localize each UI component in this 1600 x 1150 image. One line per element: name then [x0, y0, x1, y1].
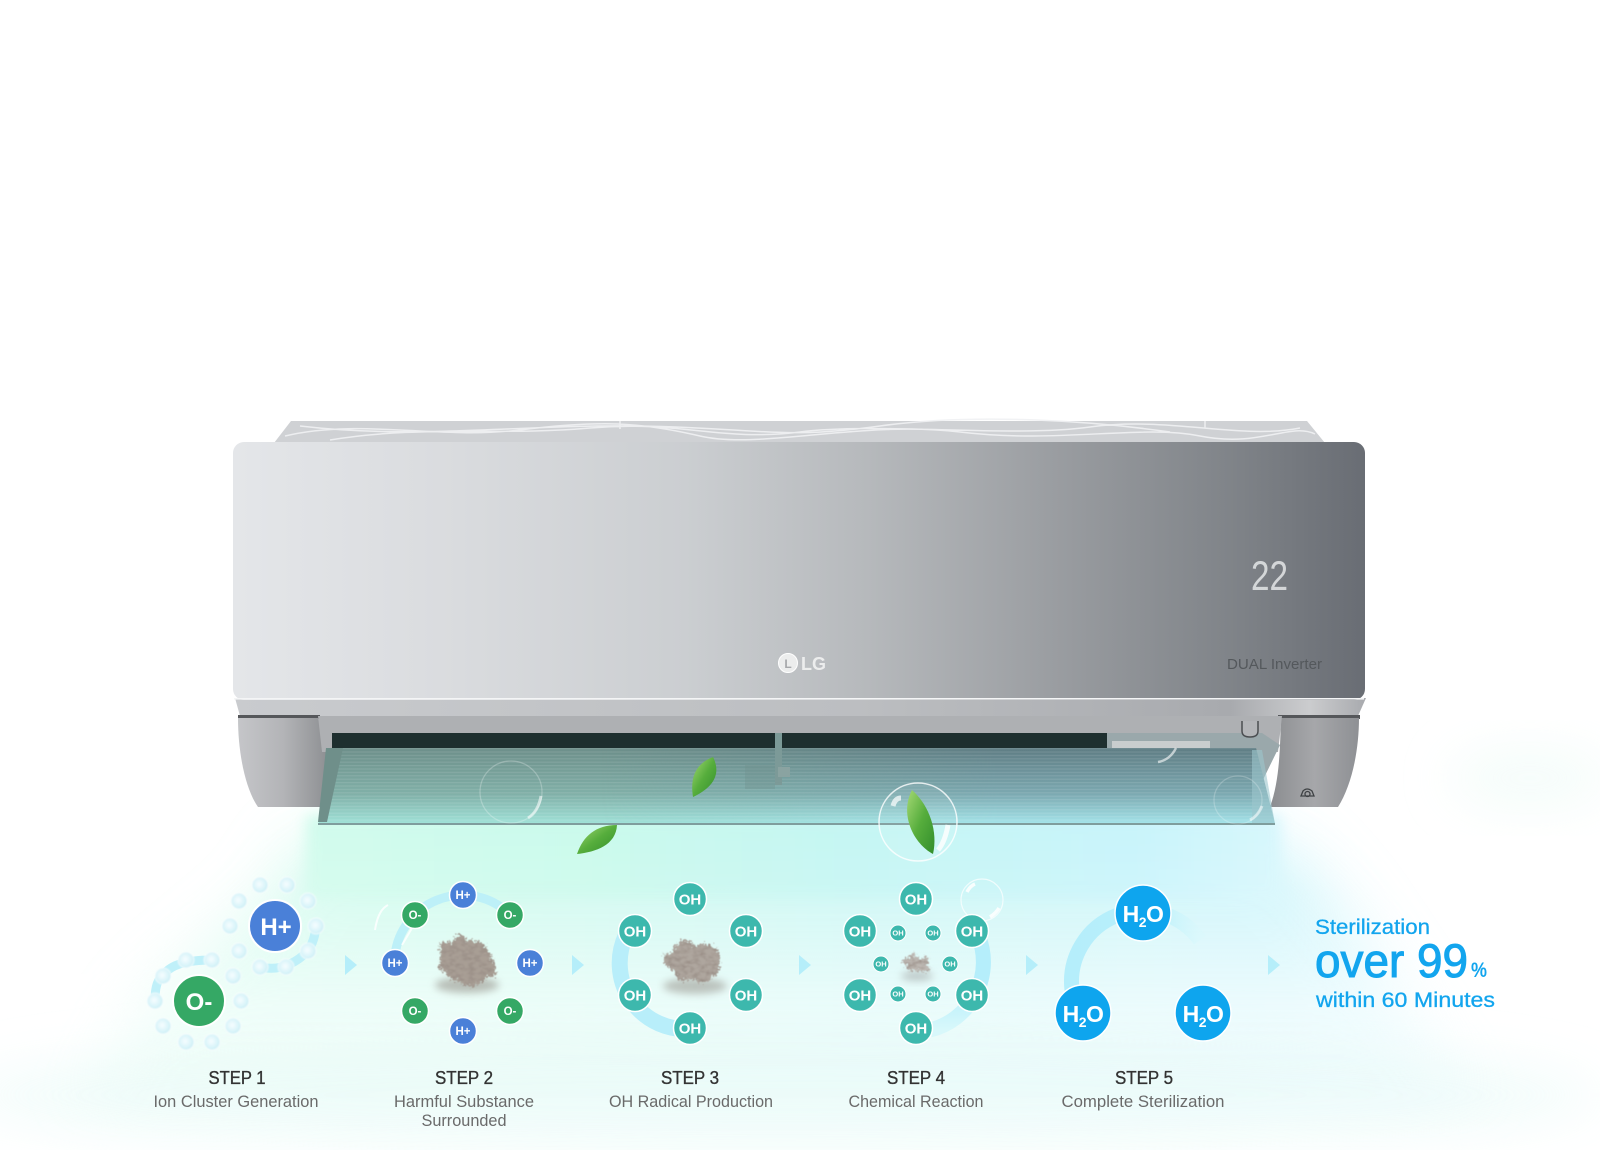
bubble: louver right: [1214, 776, 1262, 824]
ion labels: [387, 890, 538, 1038]
step 2 label: STEP 2: [435, 1068, 493, 1088]
ring arc: [395, 895, 505, 955]
step 2 description: Surrounded: [422, 1112, 506, 1130]
ion labels: H+: [522, 958, 538, 970]
arrow 5: [1268, 955, 1280, 975]
small OH ions: [873, 925, 958, 1002]
small OH labels: OH: [892, 929, 904, 938]
OH ions: [618, 882, 762, 1044]
arrow 4: [1026, 955, 1038, 975]
LG logo: LG: [801, 654, 826, 674]
over 99 percent: %: [1471, 959, 1487, 982]
leaf in bubble: [907, 790, 934, 854]
dust: [438, 940, 496, 984]
step 4: [844, 879, 1003, 1111]
louver: [318, 748, 1275, 825]
within 60 minutes line: within 60 Minutes: [1315, 989, 1495, 1012]
vent clip: [1112, 741, 1210, 749]
step 1 label: STEP 1: [208, 1068, 266, 1088]
H2O molecule right: [1175, 985, 1231, 1041]
H2O molecule right: H: [1183, 1001, 1199, 1027]
vent housing: [318, 716, 1282, 752]
large OH labels: OH: [849, 988, 871, 1004]
right end cap: [1270, 718, 1359, 807]
background mist: [0, 752, 1600, 1150]
result callout: [1315, 916, 1495, 1012]
leaf: lower: [577, 825, 617, 854]
large OH labels: OH: [905, 892, 927, 908]
H2O molecule left: 2: [1079, 1014, 1087, 1030]
small OH labels: OH: [927, 929, 939, 938]
H2O molecule left: [1055, 985, 1111, 1041]
small OH labels: [875, 929, 956, 999]
ion cluster arcs: [155, 926, 316, 1001]
step 5: [1055, 885, 1231, 1111]
H2O molecule top: [1115, 885, 1171, 941]
lower band: [235, 698, 1366, 716]
step 2: [375, 882, 544, 1130]
vent slot: [332, 733, 1108, 748]
bubble: [375, 905, 412, 945]
H2O molecule right: O: [1206, 1001, 1223, 1027]
LG logo: [778, 654, 826, 674]
ion labels: H+: [455, 1026, 471, 1038]
large OH labels: OH: [905, 1020, 927, 1038]
air conditioner unit: [233, 419, 1366, 825]
step 2 description: Harmful Substance: [394, 1093, 534, 1111]
step 3 label: STEP 3: [661, 1068, 719, 1088]
OH labels: OH: [735, 924, 757, 940]
H2O molecule left: O: [1086, 1001, 1103, 1027]
bubble: [961, 879, 1003, 921]
DUAL Inverter label: DUAL Inverter: [1227, 657, 1322, 673]
panel highlight: [234, 698, 1364, 700]
OH labels: OH: [679, 1020, 701, 1038]
dust shadow: [901, 971, 933, 981]
sterilization line: Sterilization: [1315, 916, 1430, 939]
water dots: [147, 877, 324, 1050]
ion labels: O-: [409, 910, 422, 922]
H2O molecule top: O: [1146, 901, 1163, 927]
OH labels: OH: [679, 892, 701, 908]
O- ion: O-: [186, 989, 212, 1016]
OH labels: OH: [624, 924, 646, 940]
right latch: [1242, 721, 1258, 737]
step 1: [147, 877, 324, 1111]
ring arc: [620, 935, 690, 1029]
bubble: louver left: [480, 761, 542, 823]
dust shadow: [435, 977, 499, 993]
leaf: upper: [692, 757, 716, 797]
ion labels: H+: [387, 958, 403, 970]
OH labels: OH: [624, 988, 646, 1004]
ion labels: O-: [504, 910, 517, 922]
O- ion: [173, 975, 225, 1027]
ring arc: [1072, 911, 1200, 990]
small OH labels: OH: [892, 990, 904, 999]
ring arc: [930, 935, 983, 1030]
ion labels: O-: [504, 1006, 517, 1018]
H+ ion: [249, 900, 301, 952]
step 3 description: OH Radical Production: [609, 1093, 773, 1111]
top shell: [274, 419, 1325, 443]
arrow 3: [799, 955, 811, 975]
H2O molecule left: H: [1063, 1001, 1079, 1027]
small OH labels: OH: [875, 960, 887, 969]
step 4 label: STEP 4: [887, 1068, 945, 1088]
ion labels: H+: [455, 890, 471, 902]
step 4 description: Chemical Reaction: [848, 1093, 984, 1111]
H2O molecule right: 2: [1199, 1014, 1207, 1030]
step 1 description: Ion Cluster Generation: [154, 1093, 318, 1111]
OH labels: OH: [735, 988, 757, 1004]
large OH ions: [844, 882, 988, 1044]
dust: [904, 952, 930, 974]
H2O molecule top: H: [1123, 901, 1139, 927]
LG logo: L: [784, 657, 792, 671]
small OH labels: OH: [944, 960, 956, 969]
large OH labels: [849, 892, 983, 1038]
temperature display: 22: [1251, 552, 1288, 599]
OH labels: [624, 892, 757, 1038]
step 5 label: STEP 5: [1115, 1068, 1173, 1088]
right vent housing: [1107, 733, 1280, 790]
ions: [382, 882, 544, 1044]
ion labels: O-: [409, 1006, 422, 1018]
center bracket: [745, 733, 790, 789]
small OH labels: OH: [927, 990, 939, 999]
large OH labels: OH: [961, 988, 983, 1004]
bubble with leaf: [879, 783, 957, 861]
H+ ion: H+: [260, 914, 292, 941]
left end cap: [238, 718, 329, 807]
bubble fragment: [1158, 748, 1176, 762]
step 5 description: Complete Sterilization: [1062, 1093, 1224, 1111]
cap shadow lines: [238, 715, 1360, 719]
over 99 percent: over 99: [1315, 934, 1468, 987]
step 3: [609, 882, 773, 1111]
H2O molecule top: 2: [1139, 914, 1147, 930]
arrow 1: [345, 955, 357, 975]
dust shadow: [663, 978, 727, 994]
front mirror panel: [233, 442, 1365, 700]
large OH labels: OH: [961, 924, 983, 940]
arrow 2: [572, 955, 584, 975]
eye sensor icon: [1301, 789, 1314, 796]
dust: [667, 941, 723, 983]
large OH labels: OH: [849, 924, 871, 940]
